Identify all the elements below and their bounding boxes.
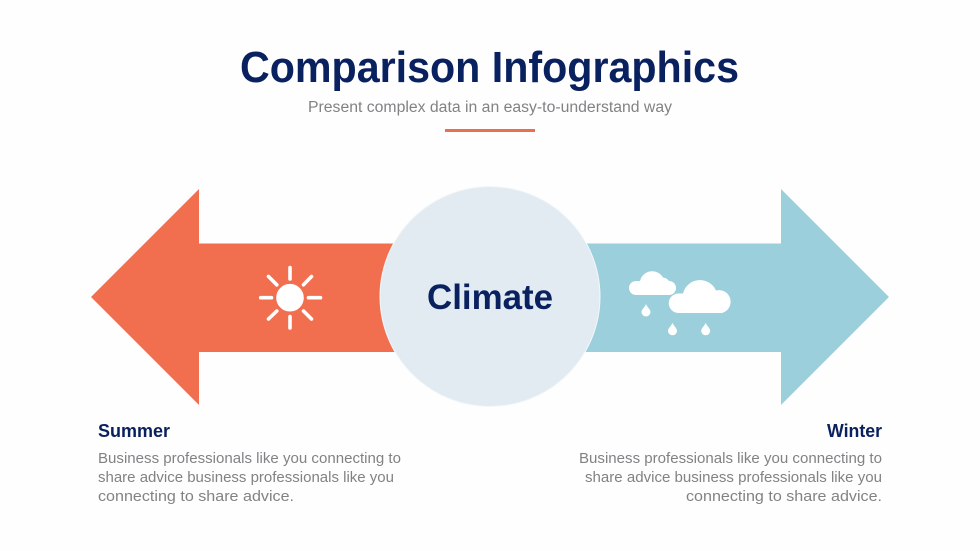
- winter description: Business professionals like you connecting to: [579, 451, 882, 467]
- winter description: [579, 451, 882, 505]
- panel: winter: [579, 421, 882, 505]
- winter description: connecting to share advice.: [686, 489, 882, 505]
- panel: summer: [98, 421, 401, 505]
- large cloud: [669, 280, 731, 313]
- title: Comparison Infographics: [240, 43, 739, 92]
- summer description: [98, 451, 401, 505]
- summer description: connecting to share advice.: [98, 489, 294, 505]
- small cloud: [629, 271, 676, 295]
- summer description: share advice business professionals like you: [98, 470, 394, 486]
- center label: Climate: [427, 278, 553, 317]
- left arrow: summer: [91, 189, 400, 405]
- right arrow: winter: [580, 189, 889, 405]
- summer heading: Summer: [98, 421, 170, 441]
- winter heading: Winter: [827, 421, 882, 441]
- title accent rule: [445, 129, 535, 132]
- summer description: Business professionals like you connecting to: [98, 451, 401, 467]
- subtitle: Present complex data in an easy-to-understand way: [308, 99, 672, 116]
- icon: sun: [261, 268, 320, 328]
- icon: rain clouds: [629, 271, 731, 335]
- center circle: [380, 186, 600, 406]
- rain drops: [642, 304, 650, 316]
- winter description: share advice business professionals like you: [585, 470, 882, 486]
